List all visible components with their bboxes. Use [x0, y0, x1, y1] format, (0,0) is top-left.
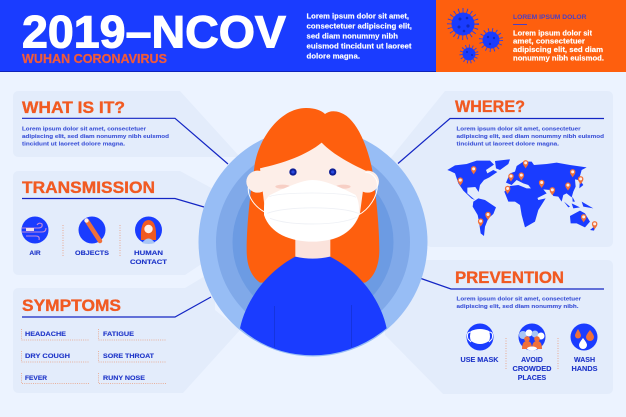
- text block: [456, 296, 582, 310]
- text block: Lorem ipsum dolor sit amet, consectetuer: [456, 126, 581, 132]
- connector line: [22, 118, 228, 164]
- subtitle: WUHAN CORONAVIRUS: [22, 51, 167, 66]
- text block: Lorem ipsum dolor sit amet, consectetuer: [22, 126, 147, 132]
- symptom list: RUNY NOSE: [103, 375, 146, 382]
- orange panel rule: [513, 24, 527, 25]
- label: avoid crowded places: CROWDED: [512, 366, 552, 373]
- cheeks: [275, 185, 351, 189]
- text block: [22, 126, 170, 148]
- panel: where: [385, 91, 613, 247]
- icon: air: [22, 216, 48, 244]
- label: human contact: CONTACT: [130, 259, 167, 266]
- text block: tincidunt ut laoreet dolore magna.: [22, 142, 125, 148]
- text block: adipiscing elit, sed diam nonummy nibh euismod: [22, 134, 170, 140]
- world map with pins: [447, 159, 597, 236]
- central rings: [198, 128, 428, 356]
- panel: symptoms: [13, 270, 240, 393]
- text block: Lorem ipsum dolor sit amet, consectetuer: [456, 296, 582, 302]
- label: avoid crowded places: PLACES: [518, 375, 547, 382]
- neck: [295, 232, 330, 260]
- sweater seams: [275, 305, 352, 347]
- connector line: [398, 118, 604, 164]
- symptom list: SORE THROAT: [103, 353, 154, 360]
- separators: [63, 225, 120, 257]
- symptom list: FEVER: [25, 375, 47, 382]
- connector line: [421, 278, 604, 289]
- symptom list: HEADACHE: [25, 331, 67, 338]
- heading: prevention: PREVENTION: [455, 268, 564, 287]
- text block: adipiscing elit, sed diam nonummy nibh.: [456, 304, 579, 310]
- orange panel text block: Lorem ipsum dolor sit: [513, 28, 592, 37]
- symptom list: FATIGUE: [103, 331, 135, 338]
- icon: objects: [78, 216, 106, 244]
- label: human contact: HUMAN: [134, 250, 163, 257]
- mask: [248, 173, 377, 242]
- icon: use mask: [466, 324, 494, 350]
- hair: [247, 108, 379, 283]
- heading: what is it: WHAT IS IT?: [22, 98, 125, 117]
- label: objects: OBJECTS: [75, 250, 110, 257]
- icon: avoid crowded places: [518, 324, 546, 350]
- text block: [456, 126, 605, 148]
- header text block: euismod tincidunt ut laoreet: [306, 42, 412, 50]
- text block: tincidunt ut laoreet dolore magna.: [456, 142, 559, 148]
- symptom list: [25, 331, 154, 382]
- connector line: [22, 198, 204, 207]
- header text block: sed diam nonummy nibh: [306, 32, 398, 40]
- heading: symptoms: SYMPTOMS: [22, 296, 121, 315]
- dotted frames: [22, 329, 166, 384]
- orange panel heading: LOREM IPSUM DOLOR: [513, 14, 587, 21]
- panel: transmission: [13, 171, 215, 275]
- orange panel text block: nonummy nibh euismod.: [513, 53, 604, 62]
- text block: adipiscing elit, sed diam nonummy nibh euismod: [456, 134, 605, 140]
- header bottom line: [0, 71, 436, 72]
- separators: [506, 338, 558, 370]
- heading: transmission: TRANSMISSION: [22, 178, 155, 197]
- label: avoid crowded places: AVOID: [521, 357, 543, 364]
- panel: what is it: [13, 91, 240, 164]
- orange header panel: [436, 0, 626, 72]
- header text block: [306, 12, 412, 60]
- ears: [246, 171, 379, 193]
- icon: wash hands: [570, 324, 598, 350]
- orange panel text block: adipiscing elit, sed diam: [513, 45, 603, 54]
- heading: where: WHERE?: [455, 97, 525, 116]
- header text block: Lorem ipsum dolor sit amet,: [306, 12, 409, 20]
- icon: virus cluster: [450, 10, 501, 62]
- title: 2019–NCOV: [22, 6, 286, 58]
- illustration: woman wearing mask: [240, 108, 387, 355]
- label: avoid crowded places: [512, 357, 552, 382]
- blue sweater: [240, 257, 387, 355]
- label: wash hands: HANDS: [572, 366, 598, 373]
- face: [260, 143, 366, 242]
- eyes: [289, 168, 336, 176]
- label: wash hands: [572, 357, 598, 373]
- header text block: consectetuer adipiscing elit,: [306, 22, 412, 30]
- label: human contact: [130, 250, 167, 266]
- header text block: dolore magna.: [306, 52, 360, 60]
- symptom list: DRY COUGH: [25, 353, 70, 360]
- panel: prevention: [385, 260, 613, 394]
- label: air: AIR: [29, 250, 41, 257]
- orange panel text block: amet, consectetuer: [513, 37, 585, 46]
- orange panel text block: [513, 28, 604, 62]
- header band: [0, 0, 436, 72]
- label: wash hands: WASH: [574, 357, 595, 364]
- icon: human contact: [135, 216, 162, 244]
- label: use mask: USE MASK: [460, 357, 498, 364]
- connector line: [22, 297, 211, 317]
